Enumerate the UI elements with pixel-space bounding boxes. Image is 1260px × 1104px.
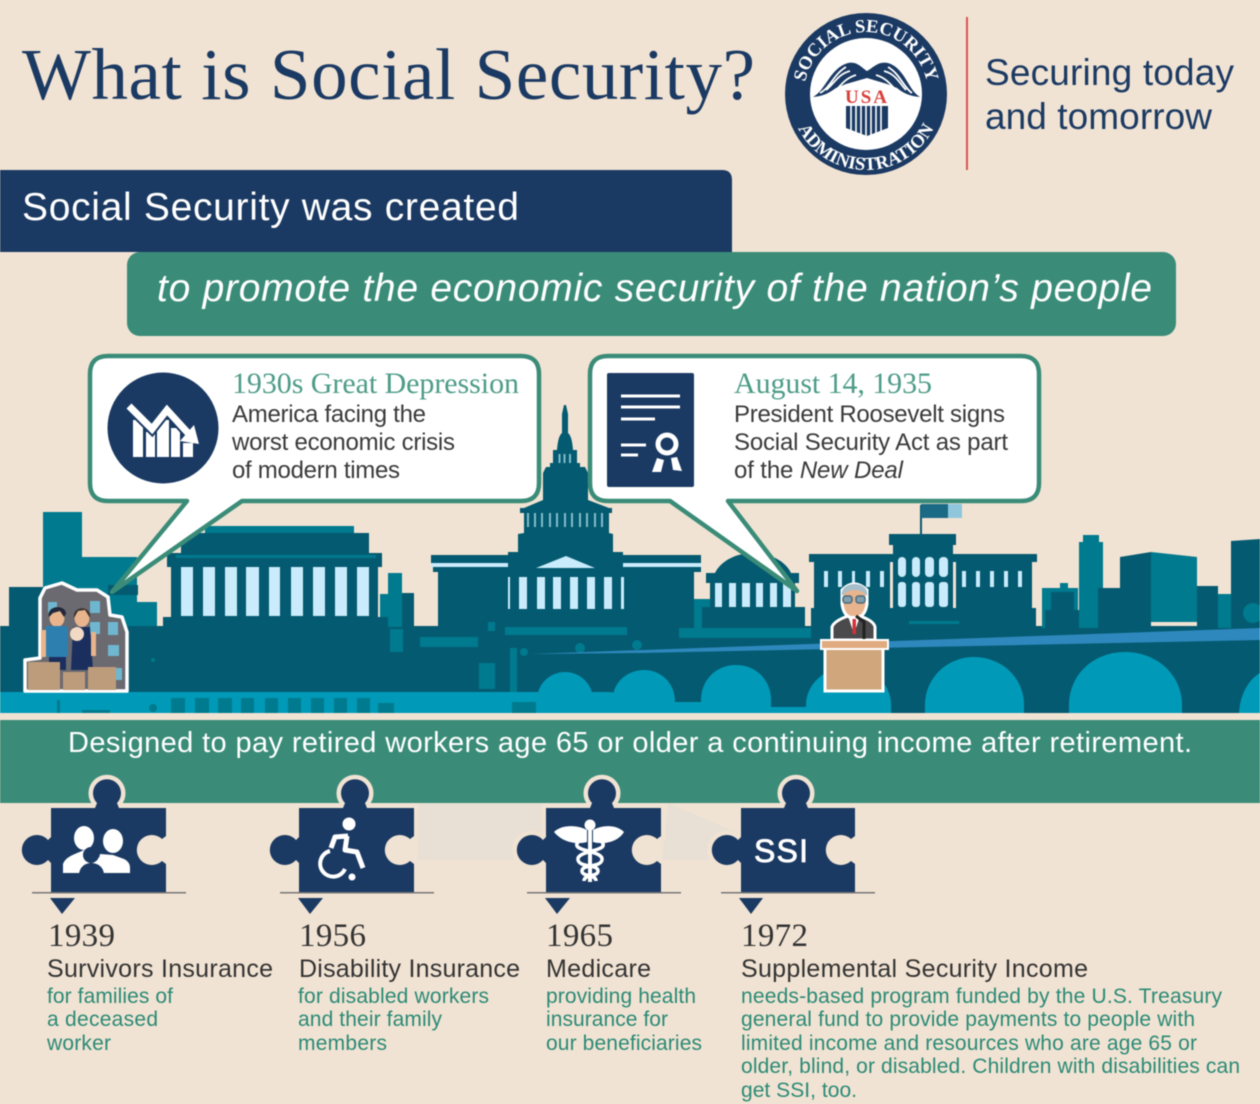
column: 1965 medicare: providing health	[546, 985, 696, 1008]
column: 1956 disability insurance: and their family	[298, 1008, 442, 1031]
callout: August 14, 1935	[590, 356, 1039, 591]
column: 1939 survivors insurance	[46, 918, 273, 1055]
callout text: of the New Deal	[734, 457, 904, 484]
water	[0, 692, 537, 713]
column: 1965 medicare: Medicare	[546, 955, 651, 983]
band between sections	[0, 713, 1260, 720]
logo: Social Security Administration seal: ADMINISTRATION	[798, 122, 934, 171]
callout text: August 14, 1935	[734, 367, 932, 400]
banner: designed to pay	[0, 720, 1260, 803]
icon: SSI label: SSI	[754, 833, 808, 869]
column: 1939 survivors insurance: for families of	[47, 985, 173, 1008]
banner: Social Security was created	[0, 170, 732, 252]
skyline illustration	[0, 405, 1260, 713]
column: 1965 medicare	[546, 918, 702, 1055]
banner: purpose statement: to promote the economic security of the nation’s people	[157, 267, 1152, 310]
column: 1956 disability insurance: members	[298, 1032, 387, 1055]
puzzle: SSI	[712, 779, 875, 914]
column: 1965 medicare: insurance for	[546, 1008, 668, 1031]
banner: purpose statement	[127, 252, 1176, 336]
banner: designed to pay: Designed to pay retired workers age 65 or older a continuing income after retirement.	[68, 727, 1192, 759]
column: 1972 supplemental security income: 1972	[741, 918, 808, 954]
figure: president at podium	[821, 584, 888, 691]
bridge arches	[537, 652, 1260, 713]
callout text	[734, 367, 1008, 484]
river	[530, 628, 1260, 654]
column: 1939 survivors insurance: 1939	[48, 918, 115, 954]
accent blocks	[151, 622, 642, 693]
column: 1972 supplemental security income: Supplemental Security Income	[741, 955, 1088, 983]
logo: Social Security Administration seal	[784, 12, 948, 176]
column: 1956 disability insurance: Disability Insurance	[299, 955, 520, 983]
title: What is Social Security?	[22, 34, 755, 115]
column: 1972 supplemental security income: needs-based program funded by the U.S. Treasury	[741, 985, 1222, 1008]
column: 1972 supplemental security income: limited income and resources who are age 65 or	[741, 1032, 1197, 1055]
column: 1965 medicare: 1965	[546, 918, 613, 954]
tagline: and tomorrow	[985, 96, 1212, 137]
right skyline	[1042, 588, 1078, 628]
tagline: Securing today	[985, 52, 1234, 93]
column: 1972 supplemental security income	[741, 918, 1240, 1102]
Lincoln Memorial	[205, 526, 354, 534]
White House	[920, 505, 922, 535]
puzzle: survivors insurance	[22, 779, 186, 914]
red divider	[966, 17, 968, 170]
column: 1972 supplemental security income: older, blind, or disabled. Children with disabilities can	[741, 1055, 1240, 1078]
column: 1939 survivors insurance: worker	[46, 1032, 111, 1055]
callout text: 1930s Great Depression	[232, 367, 519, 400]
figure: displaced family sticker	[25, 583, 127, 691]
mid teal buildings, left	[43, 512, 157, 630]
callout text: Social Security Act as part	[734, 429, 1008, 456]
callout text	[231, 367, 519, 484]
column: 1972 supplemental security income: general fund to provide payments to people with	[741, 1008, 1195, 1031]
tagline	[985, 52, 1234, 137]
icon: caduceus	[554, 820, 624, 882]
icon: signed document	[607, 373, 694, 487]
faint connector bands	[418, 803, 738, 860]
column: 1956 disability insurance	[298, 918, 520, 1055]
Capitol	[431, 555, 701, 563]
column: 1972 supplemental security income: get SSI, too.	[741, 1079, 857, 1102]
icon: family	[63, 826, 130, 874]
callout text: President Roosevelt signs	[734, 401, 1005, 428]
puzzle: medicare	[517, 779, 681, 914]
callout: 1930s Great Depression	[90, 356, 539, 592]
column: 1956 disability insurance: for disabled workers	[298, 985, 489, 1008]
puzzle: disability insurance	[270, 779, 434, 914]
logo: Social Security Administration seal: USA	[845, 87, 887, 108]
column: 1939 survivors insurance: Survivors Insurance	[47, 955, 273, 983]
callout text: America facing the	[232, 401, 426, 428]
column: 1965 medicare: our beneficiaries	[546, 1032, 702, 1055]
callout text: worst economic crisis	[231, 429, 455, 456]
small dome	[715, 553, 791, 573]
column: 1956 disability insurance: 1956	[299, 918, 366, 954]
banner: Social Security was created: Social Security was created	[22, 186, 519, 229]
logo: Social Security Administration seal: SOCIAL SECURITY	[794, 19, 940, 82]
callout text: of modern times	[232, 457, 400, 484]
column: 1939 survivors insurance: a deceased	[47, 1008, 158, 1031]
icon: wheelchair	[320, 818, 363, 880]
icon: falling chart	[108, 372, 218, 484]
